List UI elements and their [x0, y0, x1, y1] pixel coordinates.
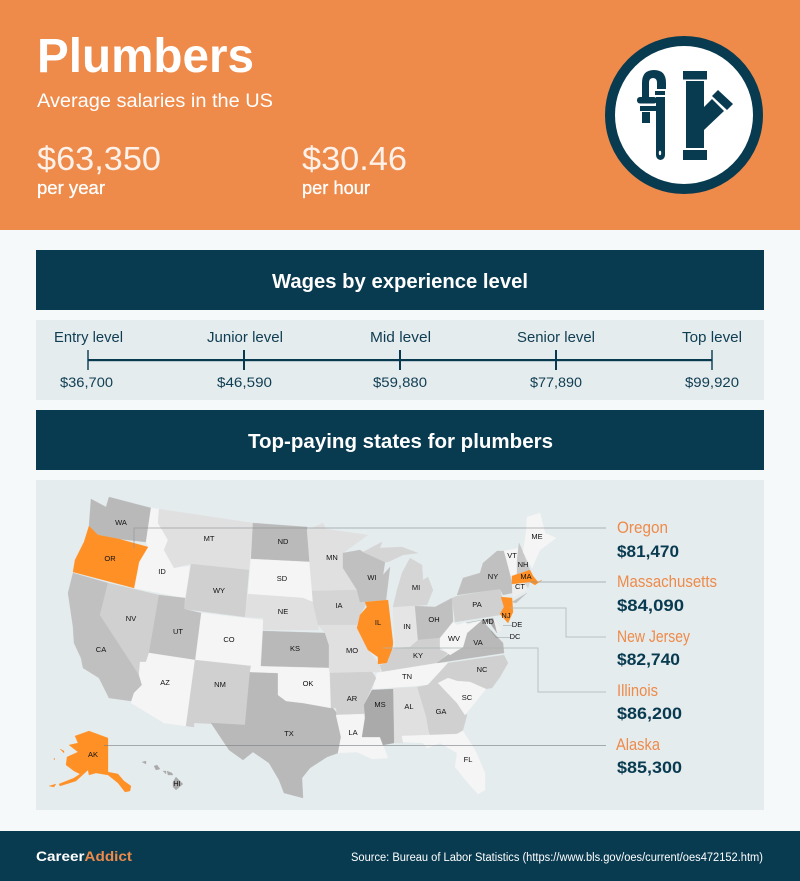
timeline values: $46,590 — [217, 374, 272, 390]
state: LA — [336, 714, 388, 759]
state: AR — [330, 672, 376, 715]
state: ID — [134, 508, 190, 598]
state: NH — [517, 543, 530, 574]
state: KS — [261, 631, 329, 668]
timeline values: $77,890 — [530, 374, 582, 390]
timeline labels: Mid level — [370, 329, 431, 346]
connector: Illinois — [383, 648, 606, 692]
panel: map of top-paying states — [36, 480, 764, 810]
state: IL — [357, 600, 393, 664]
state: MD — [466, 617, 497, 633]
subtitle: Average salaries in the US — [37, 91, 273, 112]
state: AZ: AZ — [160, 678, 170, 687]
state: OH: OH — [428, 615, 440, 624]
state: ND — [251, 523, 311, 562]
legend: New Jersey: New Jersey — [617, 628, 691, 646]
state: ME: ME — [531, 532, 543, 541]
state: PA: PA — [472, 600, 482, 609]
state: DE — [491, 618, 522, 641]
state: OK: OK — [303, 679, 313, 688]
timeline labels — [54, 329, 742, 346]
state: TN: TN — [402, 672, 412, 681]
heading: top-paying states — [36, 410, 764, 470]
timeline labels: Top level — [682, 329, 742, 346]
state: NJ — [500, 597, 513, 623]
state: UT — [149, 595, 201, 660]
state: MT — [158, 509, 253, 570]
state: SC — [438, 678, 486, 715]
state: IN: IN — [403, 622, 411, 631]
legend: Illinois: Illinois — [617, 682, 658, 700]
heading: top-paying states: Top-paying states for plumbers — [248, 431, 553, 453]
state: CA — [68, 573, 142, 701]
legend: Illinois: $86,200 — [617, 704, 682, 723]
state: WA — [89, 497, 151, 542]
timeline values: $59,880 — [373, 374, 427, 390]
state: MA — [512, 570, 542, 585]
legend: New Jersey — [617, 628, 691, 669]
state: OR: OR — [104, 554, 116, 563]
state: MI: MI — [412, 583, 420, 592]
state: ID: ID — [158, 567, 166, 576]
timeline values: $99,920 — [685, 374, 739, 390]
yearly salary — [37, 140, 161, 198]
state: NC: NC — [477, 665, 488, 674]
state: MN — [307, 523, 368, 591]
legend: Massachusetts: Massachusetts — [617, 573, 717, 591]
state: CT: CT — [515, 582, 525, 591]
state: KY — [380, 638, 448, 672]
state: WV — [440, 620, 482, 655]
legend: Oregon: Oregon — [617, 519, 668, 537]
connector: Massachusetts — [530, 581, 606, 583]
title: Plumbers — [37, 30, 254, 83]
timeline labels: Entry level — [54, 329, 123, 346]
state: PA — [452, 589, 505, 622]
yearly salary: per year — [37, 178, 105, 198]
state: MN: MN — [326, 553, 338, 562]
legend: New Jersey: $82,740 — [617, 650, 680, 669]
connector: Oregon — [134, 528, 606, 548]
state: WA: WA — [115, 518, 127, 527]
state: DE: DC — [510, 632, 521, 641]
timeline values — [60, 374, 739, 390]
state: MS: MS — [374, 700, 386, 709]
state: VT: VT — [507, 551, 517, 560]
state: CA: CA — [96, 645, 106, 654]
state: MO: MO — [346, 646, 358, 655]
state: AK: AK — [88, 750, 98, 759]
state: MA: MA — [520, 572, 532, 581]
state: SD: SD — [277, 574, 288, 583]
state: OH — [415, 598, 453, 640]
state: IL: IL — [375, 618, 381, 627]
state: AL: AL — [404, 702, 414, 711]
state: SD — [248, 559, 313, 602]
state: WV: WV — [448, 634, 460, 643]
state: MI — [363, 542, 433, 607]
state: IN — [393, 606, 418, 648]
hourly salary: per hour — [302, 178, 370, 198]
state: MT: MT — [204, 534, 215, 543]
heading: wages by experience level — [36, 250, 764, 310]
connector: Alaska — [104, 744, 606, 746]
state: NE — [245, 594, 319, 630]
state: OK — [250, 666, 331, 708]
state: UT: UT — [173, 627, 183, 636]
legend: Oregon — [617, 519, 679, 561]
state: NE: NE — [278, 607, 288, 616]
legend: Oregon: $81,470 — [617, 542, 679, 561]
state: KY: KY — [413, 651, 423, 660]
state: SC: SC — [462, 693, 473, 702]
legend: Illinois — [617, 682, 682, 723]
state: KS: KS — [290, 644, 300, 653]
hourly salary: $30.46 — [302, 140, 407, 177]
state: NY: NY — [488, 572, 498, 581]
state: CO: CO — [223, 635, 235, 644]
timeline axis — [87, 350, 713, 370]
state: TN — [373, 663, 448, 689]
state: MO — [318, 625, 380, 677]
header band — [0, 0, 800, 230]
state: NM — [186, 660, 251, 727]
state: HI — [142, 761, 183, 790]
state: NJ: NJ — [501, 611, 511, 620]
state: OR — [73, 526, 148, 588]
state: LA: LA — [348, 728, 358, 737]
state: GA — [417, 683, 467, 736]
legend: Alaska: Alaska — [616, 736, 661, 754]
timeline values: $36,700 — [60, 374, 113, 390]
state: TX — [211, 672, 341, 798]
hourly salary — [302, 140, 407, 198]
state: AZ — [131, 653, 195, 726]
state: ND: ND — [278, 537, 289, 546]
state: CO — [195, 613, 263, 667]
state: WI: WI — [367, 573, 377, 582]
state: IA — [312, 590, 367, 625]
heading: wages by experience level: Wages by experience level — [272, 271, 528, 293]
state: WY: WY — [213, 586, 225, 595]
state: AL — [393, 687, 429, 743]
logo: CareerAddict: Career Addict — [36, 849, 133, 864]
state: GA: GA — [436, 707, 446, 716]
legend: Massachusetts — [617, 573, 717, 615]
footer — [0, 831, 800, 881]
state: DE: DE — [512, 620, 522, 629]
state: NV: NV — [126, 614, 136, 623]
state: WY — [184, 564, 249, 617]
icon: wrench and pipe — [610, 41, 758, 189]
state: NM: NM — [214, 680, 226, 689]
state: NH: NH — [518, 560, 528, 569]
legend: Alaska: $85,300 — [617, 758, 682, 777]
state: IA: IA — [335, 601, 343, 610]
state: FL: FL — [464, 755, 472, 764]
panel: wages timeline — [36, 320, 764, 400]
state: CT — [512, 582, 527, 597]
state: RI — [524, 582, 530, 588]
legend: Alaska — [616, 736, 682, 777]
state: NY — [457, 551, 527, 603]
state: ME — [523, 513, 556, 568]
state: VT — [504, 548, 519, 576]
legend: Massachusetts: $84,090 — [617, 596, 684, 615]
state: VA — [437, 620, 504, 663]
state: TX: TX — [284, 729, 294, 738]
timeline labels: Junior level — [207, 329, 283, 346]
state: NV — [100, 583, 159, 675]
timeline labels: Senior level — [517, 329, 595, 346]
state: FL — [402, 731, 485, 794]
connector: New Jersey — [510, 608, 606, 637]
state: HI: HI — [173, 779, 181, 788]
state: MS — [362, 689, 394, 745]
state: MD: MD — [482, 617, 494, 626]
source note: Source: Bureau of Labor Statistics (https://www.bls.gov/oes/current/oes472152.htm) — [351, 852, 763, 864]
US state map — [49, 497, 556, 798]
state: VA: VA — [473, 638, 483, 647]
state: AK — [49, 731, 131, 792]
state: NC — [428, 655, 508, 689]
yearly salary: $63,350 — [37, 140, 161, 177]
state: AR: AR — [347, 694, 358, 703]
state: WI — [343, 550, 390, 602]
